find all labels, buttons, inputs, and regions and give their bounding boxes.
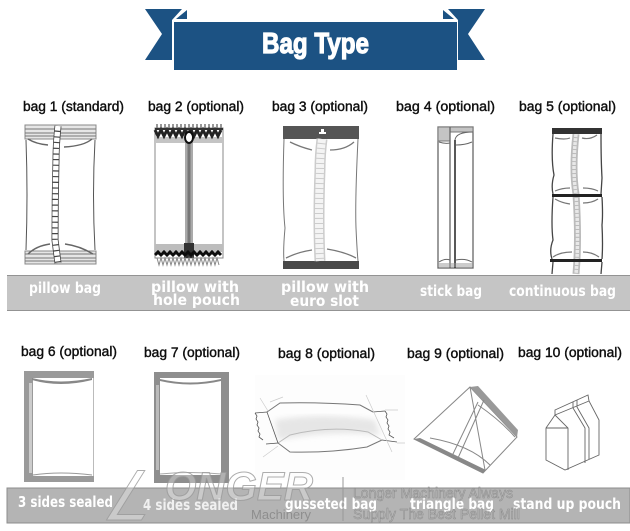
bag labels row 2: bag 8 (optional) xyxy=(278,346,375,361)
captions row 1: pillow with xyxy=(281,278,369,296)
captions row 1: stick bag xyxy=(420,282,482,300)
bag labels row 2: bag 10 (optional) xyxy=(518,345,622,360)
title: Bag Type xyxy=(262,28,369,60)
icon: bag 4 stick xyxy=(438,127,473,268)
caption band: row 1 xyxy=(7,275,630,311)
icon: bag 5 continuous xyxy=(550,128,602,274)
icon: bag 6 three sides sealed xyxy=(24,371,94,482)
bag labels row 2: bag 6 (optional) xyxy=(21,344,117,359)
watermark: slogan: Longer Machinery Always xyxy=(353,486,513,502)
captions row 1: pillow bag xyxy=(29,279,101,297)
icon: bag 1 pillow xyxy=(25,125,96,264)
bag labels row 1: bag 3 (optional) xyxy=(272,99,368,114)
bag labels row 2: bag 7 (optional) xyxy=(144,345,240,360)
bag labels row 1: bag 5 (optional) xyxy=(519,99,616,114)
captions row 2: gusseted bag xyxy=(285,495,377,513)
captions row 1 xyxy=(29,278,616,310)
bag labels row 2 xyxy=(21,344,622,361)
bag labels row 1: bag 1 (standard) xyxy=(23,99,124,114)
icon: bag 3 euro slot xyxy=(283,126,359,269)
captions row 1: euro slot xyxy=(290,292,359,310)
icon: bag 10 stand up pouch xyxy=(546,395,599,470)
watermark: LONGER logo xyxy=(90,456,313,531)
captions row 2 xyxy=(18,493,621,514)
icon: bag 2 pillow with hole xyxy=(155,124,223,265)
watermark: LONGER logo: Machinery xyxy=(251,507,311,522)
captions row 2: triangle bag xyxy=(410,495,494,513)
captions row 2: 4 sides sealed xyxy=(143,496,238,514)
bag labels row 1: bag 4 (optional) xyxy=(396,99,495,114)
icon: bag 9 triangle xyxy=(414,386,518,473)
watermark: divider xyxy=(342,477,344,521)
watermark: slogan xyxy=(353,486,520,523)
bag labels row 2: bag 9 (optional) xyxy=(407,346,504,361)
bag labels row 1 xyxy=(23,99,616,114)
caption band: row 2 xyxy=(7,488,630,523)
captions row 2: 3 sides sealed xyxy=(18,493,113,511)
icon: bag 7 four sides sealed xyxy=(154,372,229,483)
banner xyxy=(145,9,485,70)
watermark: LONGER logo: ONGER xyxy=(165,465,313,509)
captions row 1: hole pouch xyxy=(153,291,240,309)
watermark: slogan: Supply The Best Pellet Mill xyxy=(353,507,520,523)
captions row 1: pillow with xyxy=(151,278,239,296)
bag labels row 1: bag 2 (optional) xyxy=(148,99,244,114)
icon: bag 8 gusseted xyxy=(255,375,405,480)
